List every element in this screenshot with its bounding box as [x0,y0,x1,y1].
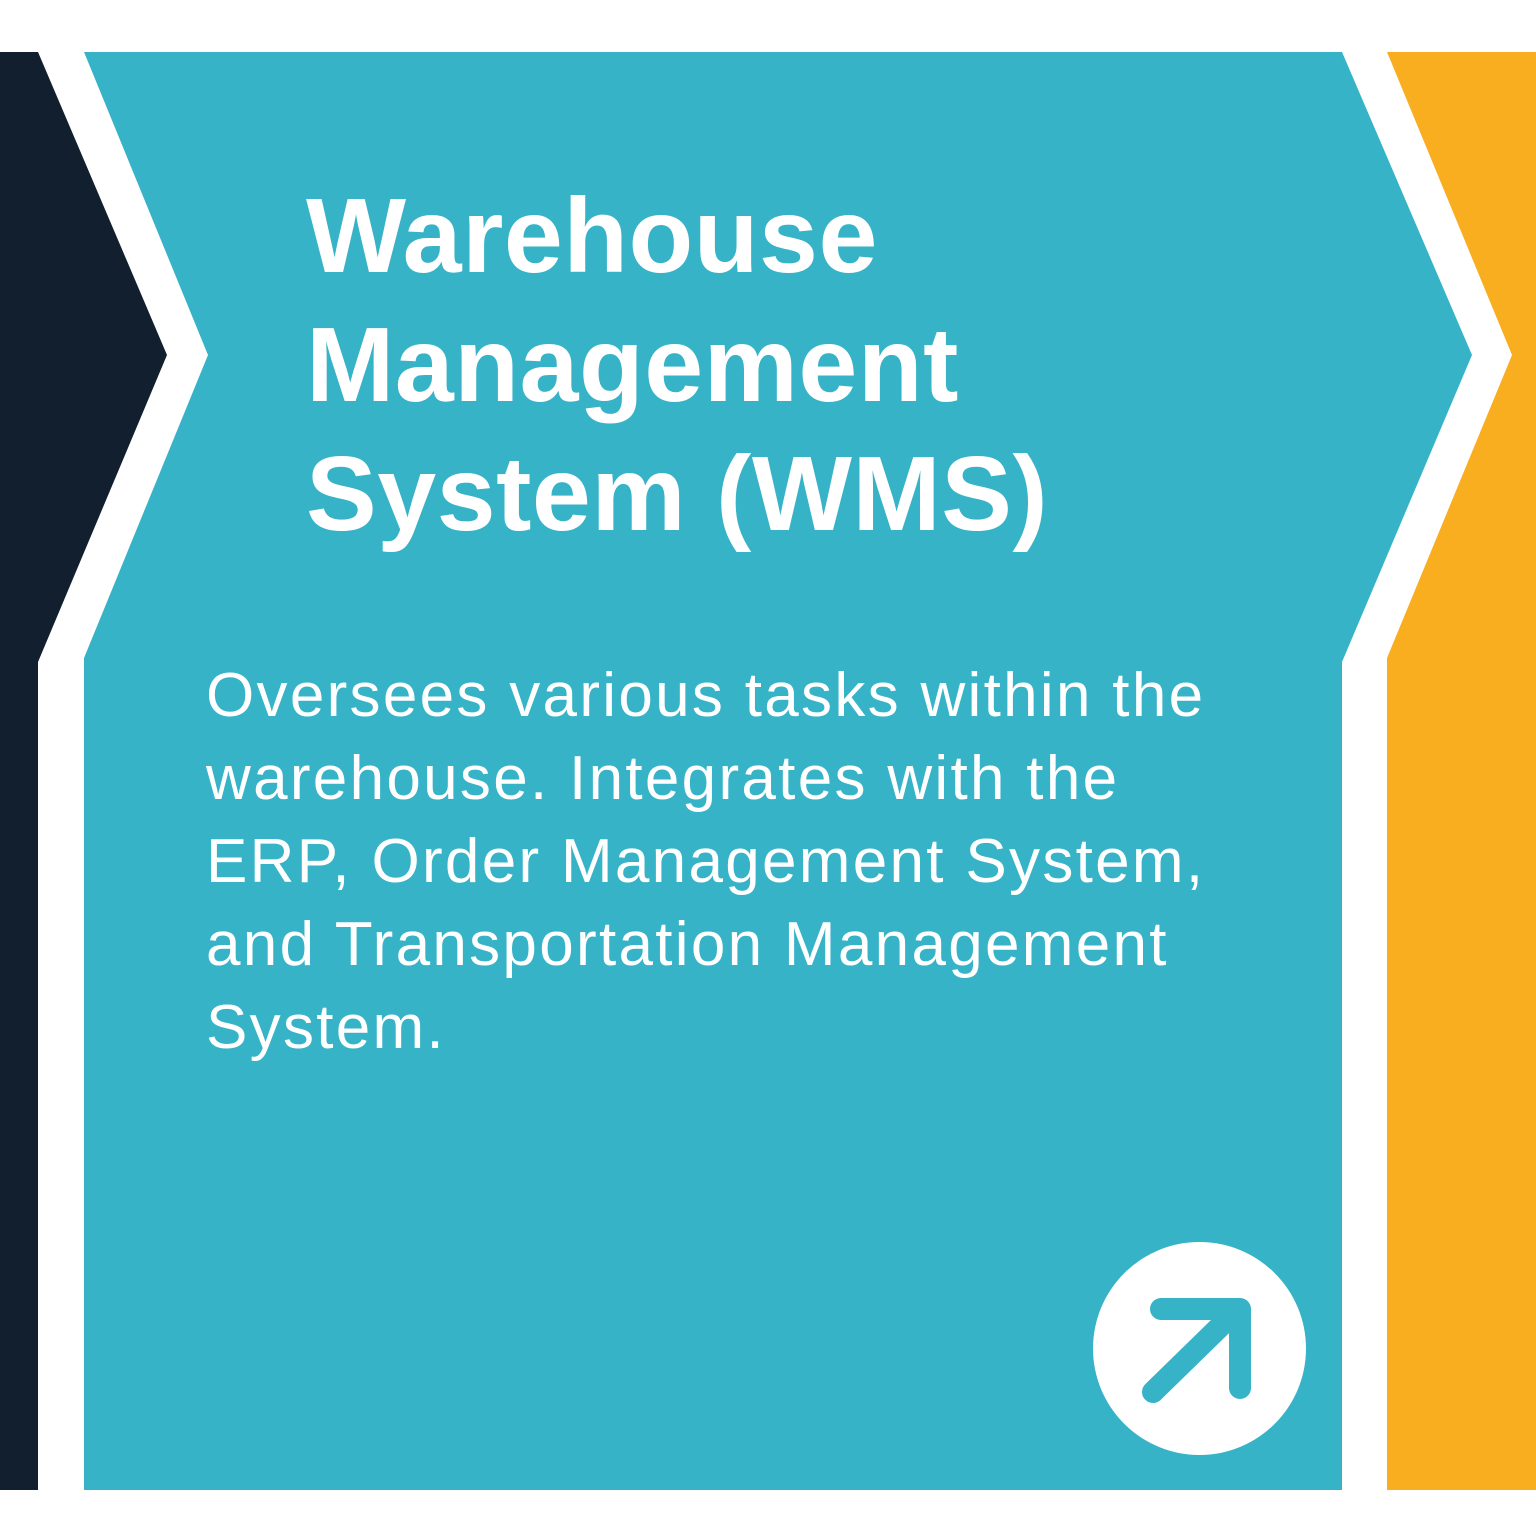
description text: warehouse. Integrates with the [206,744,1119,813]
description text: and Transportation Management [206,910,1169,979]
description text: Oversees various tasks within the [206,661,1205,730]
title [306,177,1048,553]
shape: dark navy chevron [0,52,167,1490]
description text [206,661,1205,1062]
shape: orange chevron [1387,52,1536,1490]
title: Warehouse [306,177,878,295]
description text: ERP, Order Management System, [206,827,1205,896]
title: System (WMS) [306,435,1048,553]
icon: arrow circle [1093,1242,1306,1455]
title: Management [306,306,959,424]
description text: System. [206,993,446,1062]
